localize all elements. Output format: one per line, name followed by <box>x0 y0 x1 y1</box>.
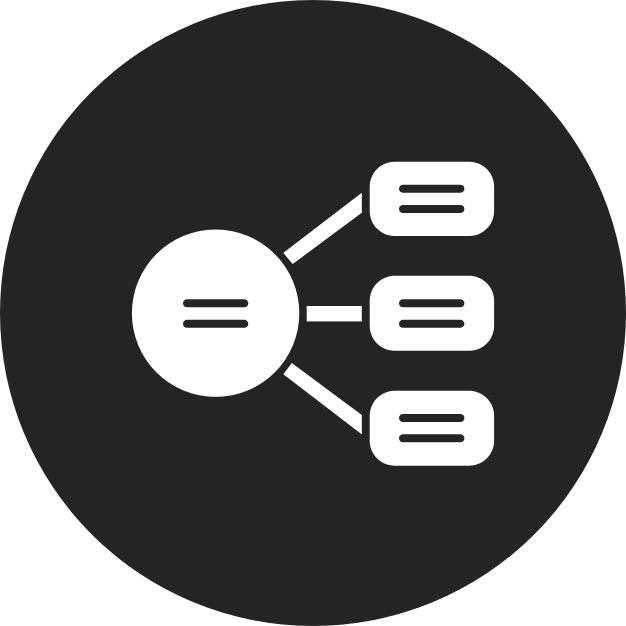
connector: top <box>283 193 362 264</box>
node: top <box>370 162 494 236</box>
node: middle <box>370 276 494 351</box>
central node <box>132 230 299 397</box>
connector: bottom <box>283 363 362 434</box>
connector: middle <box>307 306 362 321</box>
node: bottom <box>370 391 494 466</box>
